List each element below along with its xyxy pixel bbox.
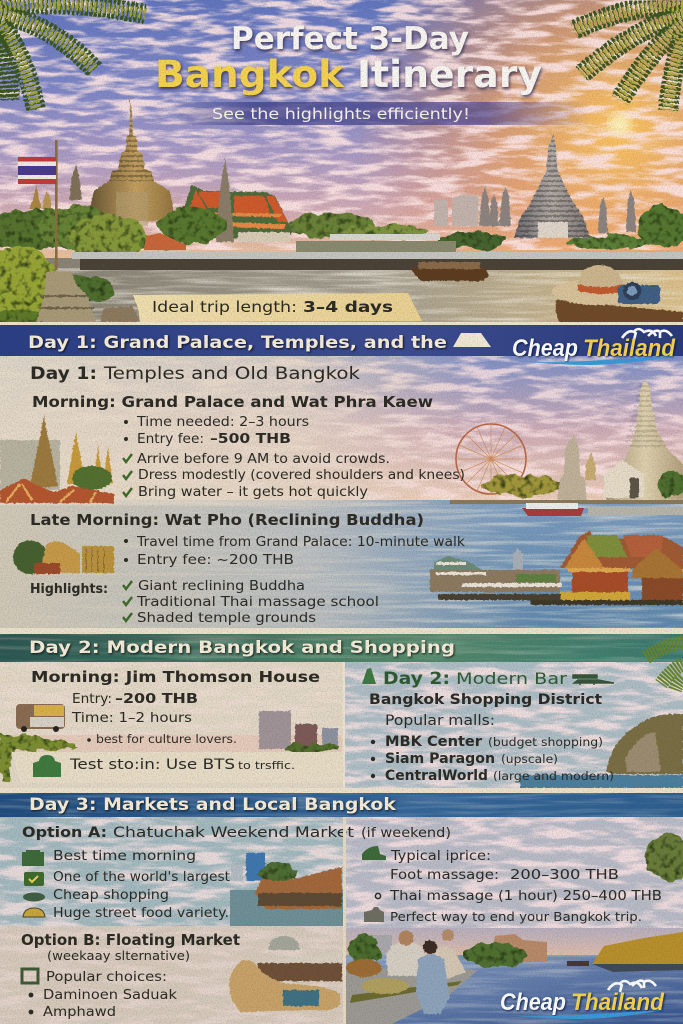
sunset sky (0, 0, 683, 262)
ideal trip length ribbon: Ideal trip length: (152, 298, 297, 316)
panel: massage and photo (345, 817, 683, 1024)
icon: shopping eye (23, 892, 45, 902)
option A list: Best time morning (53, 848, 196, 864)
late morning details: Travel time from Grand Palace: 10-minute walk (136, 534, 465, 550)
icon: small temple spires left (29, 164, 82, 209)
travel tip box (12, 752, 342, 783)
malls list: (budget shopping) (488, 735, 603, 749)
ideal trip length ribbon: 3–4 days (303, 298, 393, 316)
trees and bank left (0, 206, 226, 326)
option B list: Amphawd (43, 1004, 116, 1020)
malls list: (large and modern) (493, 769, 614, 783)
option A list (22, 848, 230, 921)
panel: day 1 (0, 356, 683, 628)
heading: jim thomson: Morning: Jim Thomson House (31, 668, 320, 686)
icon: Thai flag (18, 140, 58, 270)
massage prices: Perfect way to end your Bangkok trip. (390, 909, 642, 924)
option B list: Popular choices: (46, 969, 167, 985)
logo: Cheap Thailand top (510, 329, 676, 365)
jim thomson details: –200 THB (115, 691, 198, 707)
massage prices: Thai massage (1 hour) 250–400 THB (389, 888, 662, 904)
scene: Wat Arun and ferris wheel (450, 380, 683, 516)
heading: modern bar: Day 2: (383, 669, 450, 689)
icon: hat, camera and luggage (552, 265, 683, 334)
massage prices: Foot massage: (390, 867, 499, 883)
scene: reclining Buddha (13, 540, 114, 574)
heading: day 1: Temples and Old Bangkok (103, 364, 360, 384)
panel: option B (0, 926, 343, 1024)
heading: day 1: Day 1: (30, 364, 97, 384)
scene: city towers (259, 711, 338, 749)
heading: modern bar: Modern Bar (456, 669, 567, 688)
morning details: Entry fee: (137, 431, 204, 447)
trees far (285, 206, 683, 249)
day 3 section bar: Day 3: Markets and Local Bangkok (29, 795, 397, 815)
icon: Wat Arun prang (514, 133, 590, 238)
jim thomson details: Time: 1–2 hours (71, 710, 192, 726)
palm leaves top right (574, 6, 683, 110)
icon: calendar (22, 850, 44, 866)
logo: Cheap Thailand top: Cheap (512, 335, 578, 362)
scene: Thai house and floating village (430, 531, 683, 605)
day 3 section bar (0, 793, 683, 817)
column divider (343, 817, 346, 1024)
heading: shopping district: Bangkok Shopping District (369, 692, 602, 708)
late morning details: Entry fee: ~200 THB (137, 552, 294, 568)
day 2 section bar: Day 2: Modern Bangkok and Shopping (29, 638, 455, 658)
logo: Cheap Thailand bottom: Cheap (500, 989, 566, 1016)
heading: option B: Option B: Floating Market (21, 931, 240, 949)
icon: bus (16, 704, 65, 732)
highlights: Shaded temple grounds (137, 610, 316, 626)
scene: market pavilion and bag (229, 936, 342, 1012)
morning details: Bring water – it gets hot quickly (138, 484, 368, 500)
malls list: Siam Paragon (385, 751, 495, 767)
late morning details (124, 534, 465, 568)
icon: frame (22, 969, 38, 983)
title (155, 21, 542, 96)
panel background (0, 356, 683, 628)
highlights: Giant reclining Buddha (138, 578, 305, 594)
icon: green check badge (24, 872, 44, 886)
heading: option A: Option A: (22, 825, 107, 841)
option B note: (weekaay slternative) (47, 949, 190, 963)
scene: riverside market (231, 853, 342, 909)
icon: green bag (33, 755, 61, 777)
heading: morning: Morning: Grand Palace and Wat Phra Kaew (32, 393, 433, 411)
highlights: Traditional Thai massage school (136, 594, 379, 610)
scene: limestone rock and sea (520, 714, 683, 788)
hero scene (0, 0, 683, 334)
subtitle banner: See the highlights efficiently! (212, 105, 470, 123)
ideal trip length ribbon (133, 293, 422, 322)
morning details: Arrive before 9 AM to avoid crowds. (137, 451, 390, 467)
title: Bangkok (155, 53, 345, 96)
day 2 section bar (0, 634, 683, 662)
icon: bench glyph (573, 675, 614, 685)
palm leaves top left (0, 4, 145, 110)
option A list: One of the world's largest (53, 869, 230, 885)
scene: grand palace vignette (0, 415, 114, 503)
travel tip box: Test sto:in: Use BTS (69, 757, 235, 773)
scene: river market photo (346, 928, 683, 1024)
morning details: Time needed: 2–3 hours (136, 414, 309, 430)
icon: stone steps (36, 272, 140, 322)
heading: option A: Chatuchak Weekend Market (113, 825, 354, 841)
panel: day 2 shopping (343, 642, 683, 788)
jim thomson details: Entry: (72, 691, 112, 707)
option B list (22, 969, 177, 1020)
morning details: Dress modestly (covered shoulders and knees) (138, 467, 465, 483)
panel: option A (0, 817, 451, 926)
option A list: Cheap shopping (53, 887, 169, 903)
icon: bag glyph (362, 668, 376, 684)
highlights (30, 578, 379, 626)
jim thomson details: best for culture lovers. (96, 732, 237, 746)
malls list: (upscale) (501, 752, 558, 766)
morning details (123, 414, 465, 500)
foliage (0, 734, 76, 782)
massage prices: 200–300 THB (510, 867, 619, 883)
malls list: Popular malls: (385, 713, 495, 729)
title: Perfect 3-Day (231, 21, 469, 57)
icon: red roofed temple (183, 158, 293, 242)
icon: bag outline (364, 907, 384, 922)
skyline right (434, 186, 636, 233)
icon: massage bag (362, 846, 386, 860)
highlights: Highlights: (30, 581, 108, 597)
icon: long-tail boat (410, 262, 489, 281)
small orange pavilion (144, 233, 186, 250)
malls list: MBK Center (385, 734, 482, 750)
malls list: CentralWorld (385, 768, 488, 784)
icon: food dish (23, 908, 45, 917)
icon: roof glyph (453, 333, 491, 347)
title: Itinerary (357, 53, 542, 96)
malls list (371, 713, 614, 784)
morning details: –500 THB (210, 431, 291, 447)
heading: late morning: Late Morning: Wat Pho (Reclining Buddha) (30, 511, 424, 529)
heading: option A: (if weekend) (361, 826, 451, 841)
scene: tree (646, 834, 683, 882)
option B list: Daminoen Saduak (43, 987, 177, 1003)
travel tip box: to trsffic. (238, 760, 295, 772)
logo: Cheap Thailand bottom (498, 981, 665, 1019)
massage prices: Typical iprice: (390, 848, 491, 864)
divider band (0, 628, 683, 634)
heading: option A (22, 825, 451, 841)
riverside embankment (72, 234, 683, 270)
palm leaves (645, 642, 683, 690)
heading: day 1 (30, 364, 360, 384)
day 1 section bar: Day 1: Grand Palace, Temples, and the (28, 333, 447, 353)
jim thomson details (71, 691, 237, 746)
panel: day 2 morning (0, 662, 342, 788)
icon: Grand Palace prang (90, 95, 173, 226)
divider band (0, 788, 683, 793)
river (0, 258, 683, 326)
massage prices (362, 846, 662, 924)
subtitle banner (170, 102, 590, 125)
heading: modern bar (362, 668, 614, 689)
logo: Cheap Thailand bottom: Thailand (571, 989, 665, 1016)
logo: Cheap Thailand top: Thailand (583, 335, 676, 362)
day 1 section bar (0, 322, 683, 356)
option A list: Huge street food variety. (53, 905, 229, 921)
